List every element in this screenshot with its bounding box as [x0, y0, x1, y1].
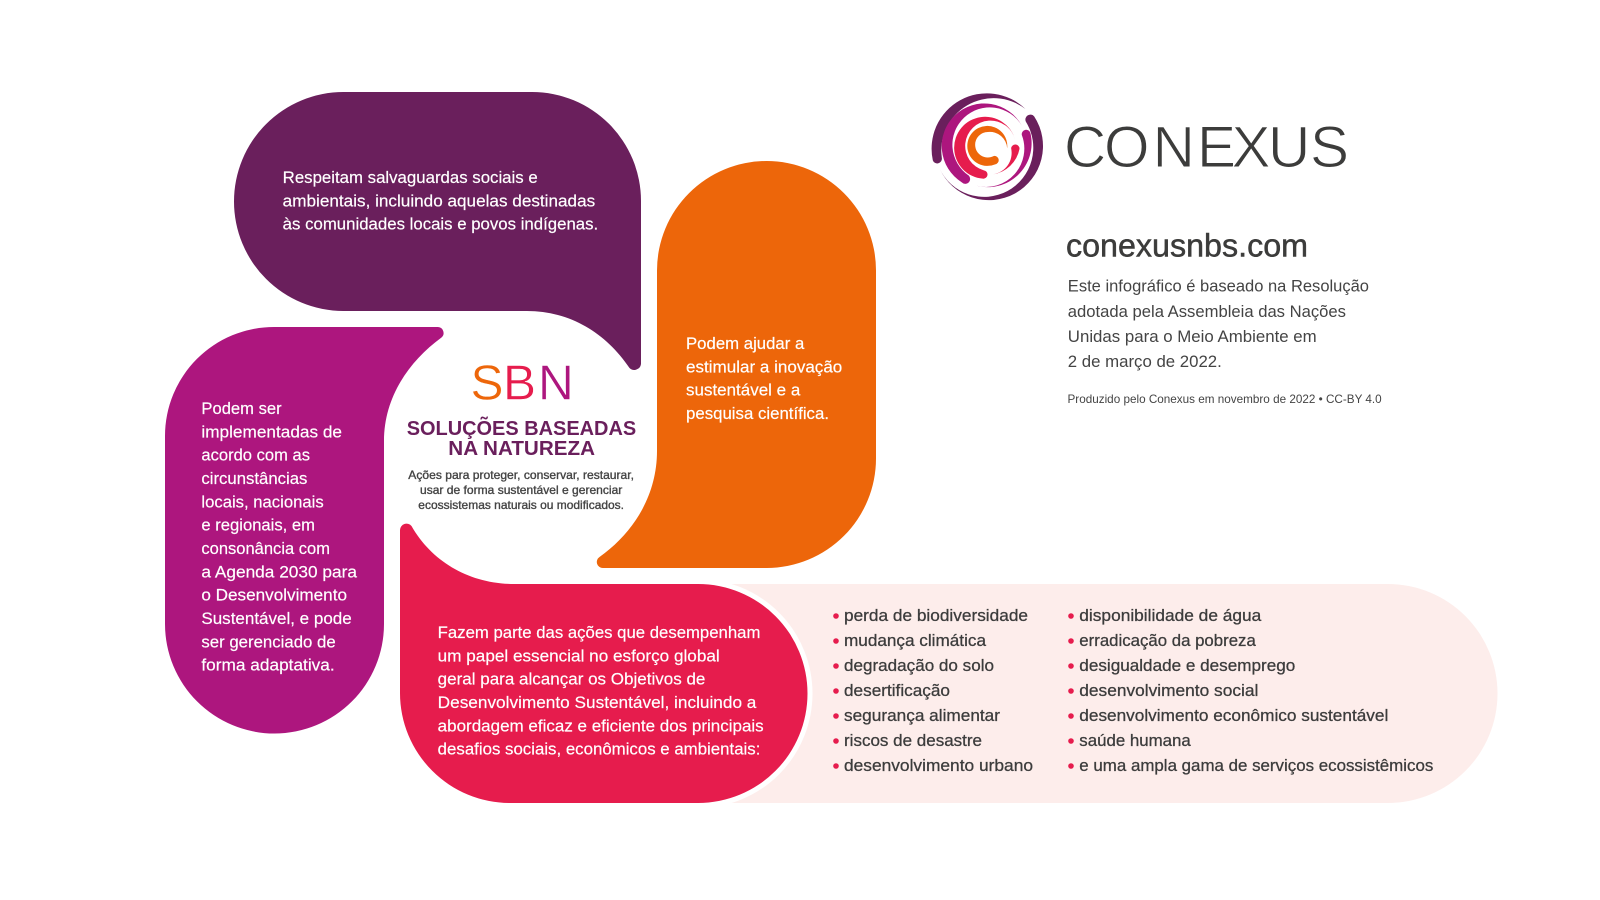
panel: crimson sustainable development goals	[400, 524, 807, 803]
list column 1: segurança alimentar	[844, 706, 1000, 725]
list column 1: degradação do solo	[844, 656, 994, 675]
list column 1: riscos de desastre	[844, 731, 982, 750]
orange panel text: Podem ajudar a	[686, 334, 805, 353]
list column 2: e uma ampla gama de serviços ecossistêmicos	[1079, 756, 1433, 775]
list column 2: desenvolvimento social	[1079, 681, 1258, 700]
source note	[1068, 278, 1369, 371]
list column 1: mudança climática	[844, 631, 987, 650]
panel: pale pink challenge list	[700, 584, 1497, 803]
orange panel text: pesquisa científica.	[686, 404, 829, 423]
subtitle	[407, 416, 636, 460]
crimson panel text: Fazem parte das ações que desempenham	[438, 623, 760, 642]
subtitle: SOLUÇÕES BASEADAS	[407, 416, 636, 440]
crimson panel text: um papel essencial no esforço global	[438, 646, 720, 665]
list column 2: saúde humana	[1079, 731, 1192, 750]
website: conexusnbs.com	[1066, 228, 1308, 264]
list column 1: desenvolvimento urbano	[844, 756, 1033, 775]
crimson panel text: Desenvolvimento Sustentável, incluindo a	[438, 693, 757, 712]
list column 1: perda de biodiversidade	[844, 606, 1028, 625]
purple panel text: ambientais, incluindo aquelas destinadas	[283, 191, 595, 210]
orange panel text: sustentável e a	[686, 381, 801, 400]
list column 1: desertificação	[844, 681, 950, 700]
subtitle: NA NATUREZA	[448, 437, 595, 460]
magenta panel text: acordo com as	[201, 446, 310, 465]
panel: orange innovation	[597, 161, 876, 568]
definition text: Ações para proteger, conservar, restaurar,	[408, 468, 634, 482]
definition text: usar de forma sustentável e gerenciar	[420, 483, 622, 497]
source note: Unidas para o Meio Ambiente em	[1068, 328, 1317, 346]
crimson panel text	[438, 623, 764, 759]
list column 1	[833, 606, 1033, 775]
magenta panel text: locais, nacionais	[201, 492, 324, 511]
magenta panel text: consonância com	[201, 539, 330, 558]
magenta panel text: a Agenda 2030 para	[201, 562, 358, 581]
crimson panel text: geral para alcançar os Objetivos de	[438, 670, 705, 689]
purple panel text	[283, 168, 598, 234]
magenta panel text: o Desenvolvimento	[201, 586, 347, 605]
Conexus wordmark: CONEXUS	[1064, 115, 1349, 180]
list column 2: erradicação da pobreza	[1079, 631, 1257, 650]
definition text: ecossistemas naturais ou modificados.	[418, 498, 624, 512]
panel: purple safeguards	[234, 92, 641, 370]
purple panel text: Respeitam salvaguardas sociais e	[283, 168, 538, 187]
list column 2: desigualdade e desemprego	[1079, 656, 1295, 675]
magenta panel text: circunstâncias	[201, 469, 307, 488]
magenta panel text: e regionais, em	[201, 516, 315, 535]
SBN heading: N	[538, 356, 574, 410]
source note: Este infográfico é baseado na Resolução	[1068, 278, 1369, 296]
magenta panel text	[201, 399, 358, 675]
list column 2	[1068, 606, 1433, 775]
list column 2: desenvolvimento econômico sustentável	[1079, 706, 1388, 725]
source note: 2 de março de 2022.	[1068, 353, 1222, 371]
magenta panel text: Sustentável, e pode	[201, 609, 352, 628]
magenta panel text: implementadas de	[201, 422, 342, 441]
SBN heading: S	[470, 356, 504, 410]
magenta panel text: ser gerenciado de	[201, 632, 336, 651]
orange panel text	[686, 334, 842, 423]
central SBN definition	[407, 356, 636, 512]
icon: Conexus spiral logo	[932, 93, 1043, 200]
orange panel text: estimular a inovação	[686, 357, 842, 376]
magenta panel text: Podem ser	[201, 399, 282, 418]
crimson panel text: abordagem eficaz e eficiente dos principais	[438, 716, 764, 735]
production credit: Produzido pelo Conexus em novembro de 2022 • CC-BY 4.0	[1068, 393, 1382, 406]
source note: adotada pela Assembleia das Nações	[1068, 303, 1346, 321]
panel: magenta adaptive implementation	[165, 327, 444, 733]
purple panel text: às comunidades locais e povos indígenas.	[283, 215, 598, 234]
SBN heading: B	[503, 356, 536, 410]
crimson panel text: desafios sociais, econômicos e ambientais:	[438, 740, 760, 759]
magenta panel text: forma adaptativa.	[201, 656, 335, 675]
list column 2: disponibilidade de água	[1079, 606, 1262, 625]
definition text	[408, 468, 634, 512]
